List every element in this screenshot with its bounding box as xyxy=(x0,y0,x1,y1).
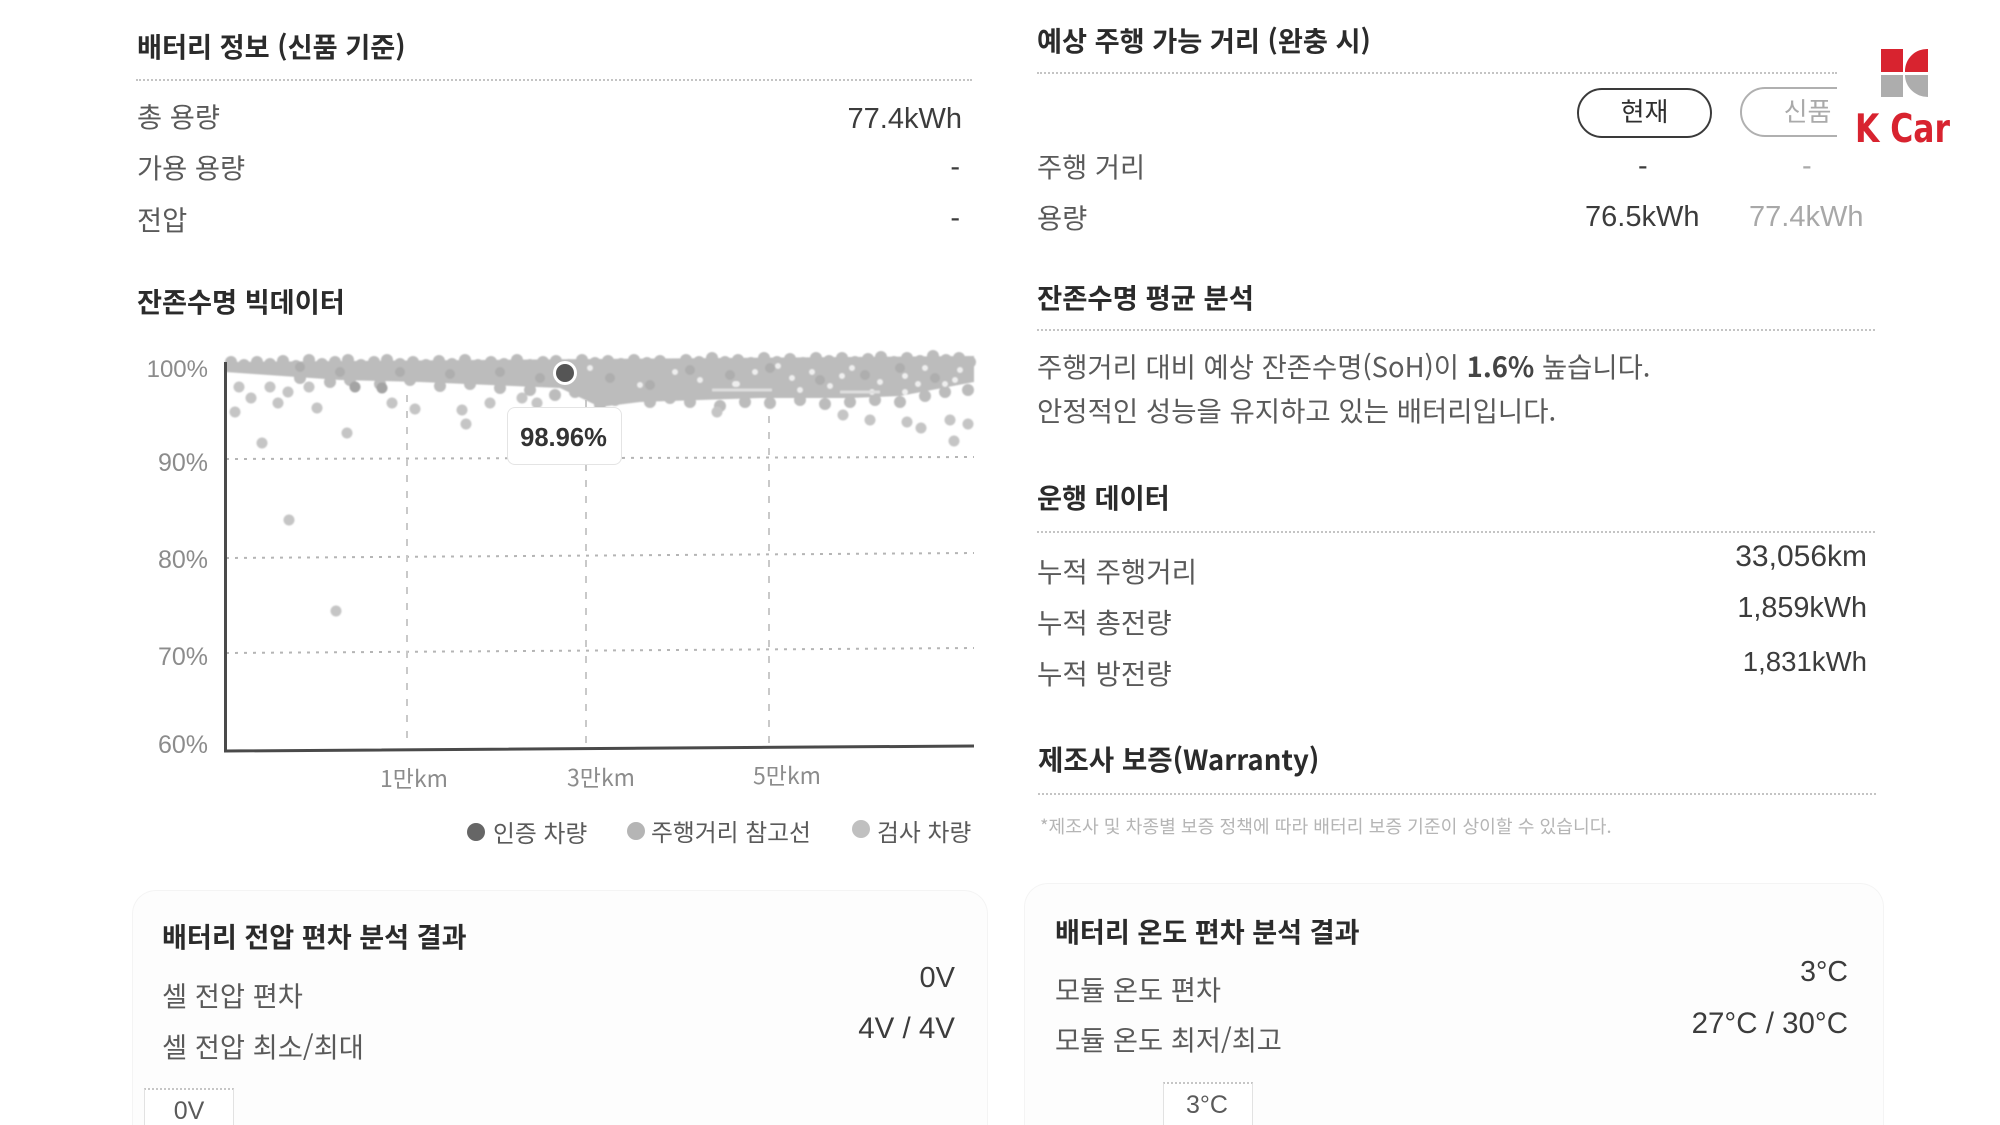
heading: warranty: 제조사 보증(Warranty) xyxy=(1038,738,1319,778)
tooltip: 98.96%: 98.96% xyxy=(520,424,607,452)
legend item: mileage reference line: 주행거리 참고선 xyxy=(651,813,811,848)
row: usable capacity: 가용 용량 xyxy=(137,146,245,186)
value: driving range new: - xyxy=(1802,150,1812,182)
value: voltage: - xyxy=(950,202,960,234)
x-axis labels xyxy=(380,757,821,794)
heading: temperature deviation: 배터리 온도 편차 분석 결과 xyxy=(1055,911,1360,950)
button: current: 현재 xyxy=(1621,92,1668,129)
logo: K Car: K Car xyxy=(1855,107,1951,152)
value: total distance: 33,056km xyxy=(1735,540,1867,573)
heading: estimated range: 예상 주행 가능 거리 (완충 시) xyxy=(1037,19,1371,59)
panel: temperature deviation xyxy=(1024,883,1884,1125)
label: 90%: 90% xyxy=(158,449,208,477)
value: module temperature min max: 27°C / 30°C xyxy=(1692,1007,1848,1040)
scatter: inspected vehicles xyxy=(225,356,974,611)
tag: 0V: 0V xyxy=(174,1097,204,1125)
button: new: 신품 xyxy=(1784,92,1831,129)
legend item: inspected vehicle: 검사 차량 xyxy=(877,813,971,848)
marker: certified vehicle xyxy=(553,361,577,385)
label: 70%: 70% xyxy=(158,643,208,671)
button: current xyxy=(1577,88,1712,138)
text: warranty note: *제조사 및 차종별 보증 정책에 따라 배터리 보증 기준이 상이할 수 있습니다. xyxy=(1040,813,1612,839)
value: driving range current: - xyxy=(1638,150,1648,182)
row: total charge: 누적 총전량 xyxy=(1037,601,1172,641)
heading: average analysis: 잔존수명 평균 분석 xyxy=(1037,276,1254,316)
value: cell voltage min max: 4V / 4V xyxy=(858,1012,955,1045)
row: cell voltage deviation: 셀 전압 편차 xyxy=(162,974,303,1014)
value: total discharge: 1,831kWh xyxy=(1743,646,1867,677)
value: total charge: 1,859kWh xyxy=(1737,592,1867,624)
label: 60%: 60% xyxy=(158,731,208,759)
tag: 0V xyxy=(144,1088,234,1125)
text: analysis sentence 1: 주행거리 대비 예상 잔존수명(SoH)이 1.6% 높습니다. xyxy=(1037,345,1650,385)
y-axis labels xyxy=(147,356,208,759)
legend xyxy=(467,813,971,849)
value: cell voltage deviation: 0V xyxy=(920,962,955,994)
heading: battery info: 배터리 정보 (신품 기준) xyxy=(137,25,406,65)
label: 50k km: 5만km xyxy=(753,757,821,791)
value: usable capacity: - xyxy=(950,151,960,183)
value: module temperature deviation: 3°C xyxy=(1800,956,1848,988)
row: module temperature deviation: 모듈 온도 편차 xyxy=(1055,968,1221,1008)
logo: K Car xyxy=(1837,28,1977,153)
row: total distance: 누적 주행거리 xyxy=(1037,550,1197,590)
row: total discharge: 누적 방전량 xyxy=(1037,652,1172,692)
axes xyxy=(226,362,974,751)
panel: battery info xyxy=(136,25,972,238)
heading: voltage deviation: 배터리 전압 편차 분석 결과 xyxy=(162,916,467,955)
label: 80%: 80% xyxy=(158,546,208,574)
tooltip: 98.96% xyxy=(507,407,622,465)
tag: 3°C: 3°C xyxy=(1186,1091,1228,1119)
row: total capacity: 총 용량 xyxy=(137,95,220,135)
row: module temperature min max: 모듈 온도 최저/최고 xyxy=(1055,1018,1282,1058)
tag: 3°C xyxy=(1163,1082,1253,1125)
row: cell voltage min max: 셀 전압 최소/최대 xyxy=(162,1025,364,1065)
label: 10k km: 1만km xyxy=(380,760,448,794)
text: analysis sentence 2: 안정적인 성능을 유지하고 있는 배터리입니다. xyxy=(1037,389,1556,429)
panel: voltage deviation xyxy=(132,890,988,1125)
heading: remaining life big data: 잔존수명 빅데이터 xyxy=(137,280,345,320)
button: new xyxy=(1740,87,1875,137)
row: voltage: 전압 xyxy=(137,198,187,238)
value: total capacity: 77.4kWh xyxy=(848,103,962,135)
heading: operation data: 운행 데이터 xyxy=(1037,476,1170,516)
row: driving range: 주행 거리 xyxy=(1037,145,1145,185)
row: capacity: 용량 xyxy=(1037,196,1087,236)
value: capacity new: 77.4kWh xyxy=(1749,201,1863,233)
label: 100%: 100% xyxy=(147,356,208,383)
label: 30k km: 3만km xyxy=(567,759,635,793)
value: capacity current: 76.5kWh xyxy=(1585,201,1699,233)
legend item: certified vehicle: 인증 차량 xyxy=(493,814,587,849)
